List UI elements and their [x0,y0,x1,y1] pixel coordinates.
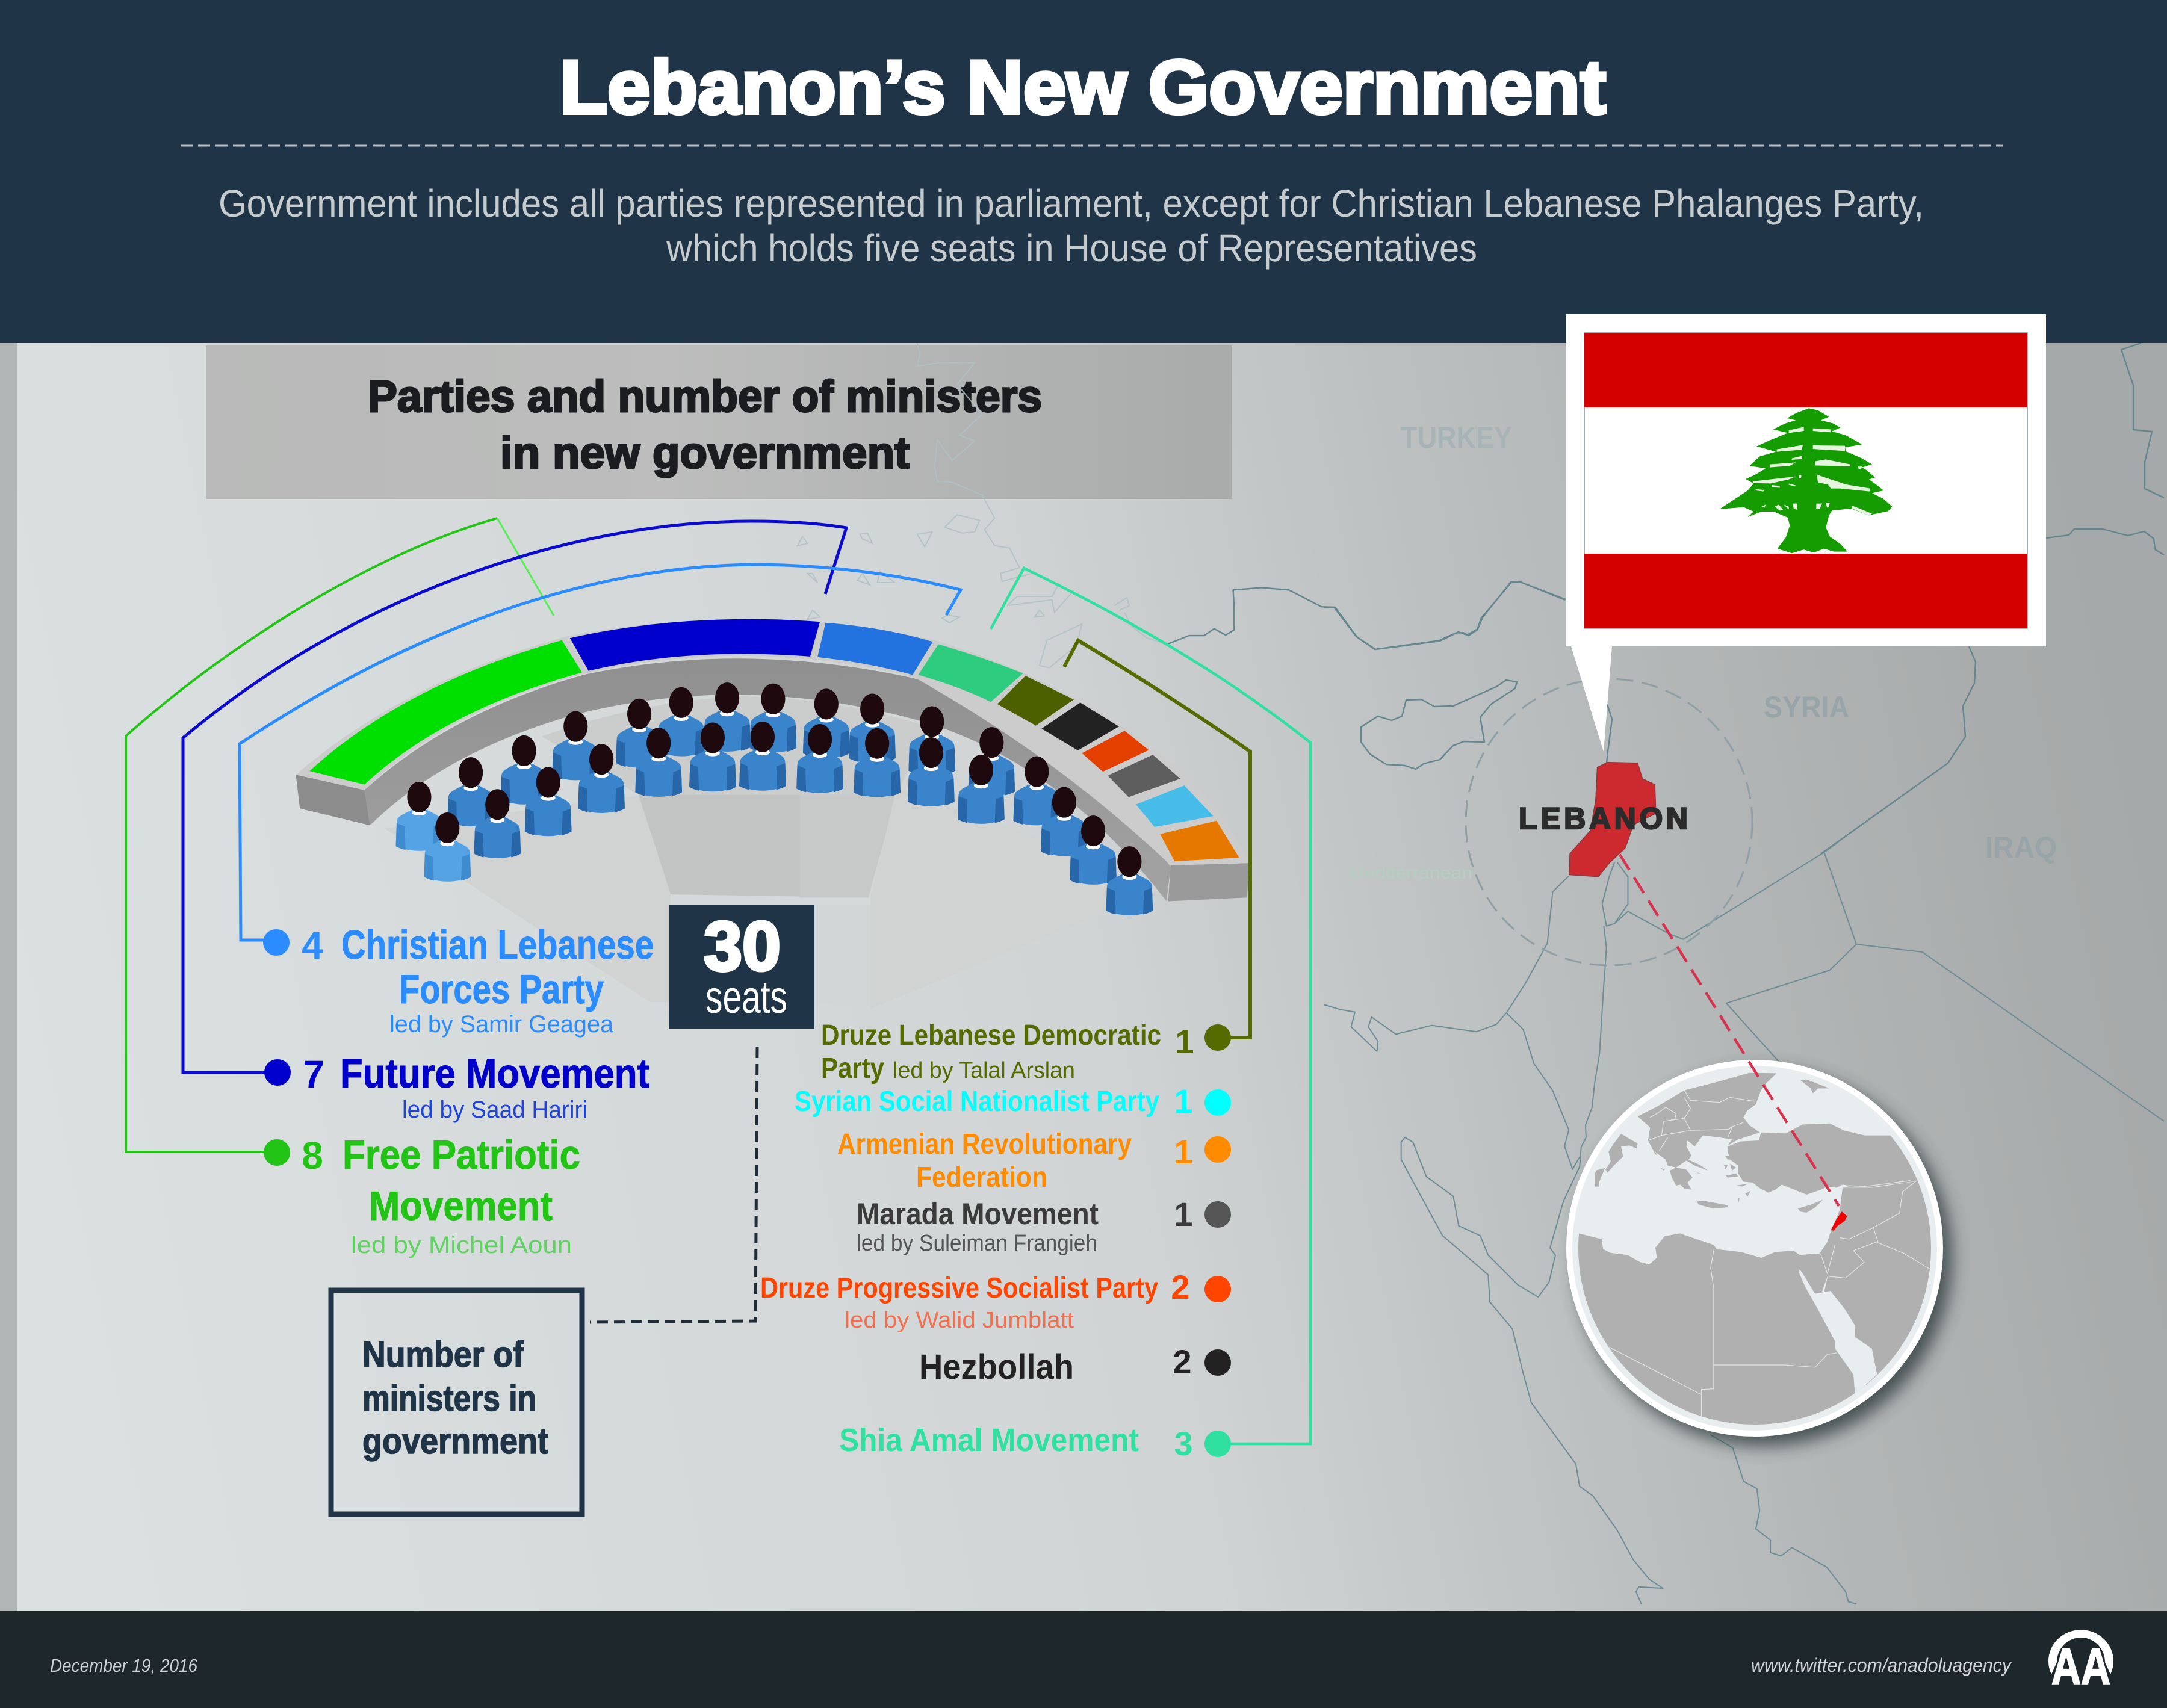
globe land masses [1578,1072,1931,1425]
legend: Armenian Revolutionary Federation: Federation [916,1162,1047,1193]
chamber wall [296,658,1249,901]
map outlines: Cyprus and east [1324,343,2164,853]
legend: Druze Lebanese Democratic Party [821,1020,1231,1085]
banner heading: in new government [500,428,910,478]
seats: Free Patriotic Movement [309,640,582,785]
seats: Future Movement [570,619,820,671]
connector: Future Movement [183,521,846,1072]
globe: Balkan borders [1648,1091,1910,1187]
key box: number of ministers: government [362,1421,548,1461]
seats: Christian Lebanese Forces [817,623,933,675]
globe: Peloponnese and Italy [1595,1134,1693,1190]
legend: Druze Progressive Socialist Party: 2 [1171,1268,1190,1306]
connector: Free Patriotic Movement [126,518,554,1152]
legend: Free Patriotic Movement [264,1132,580,1258]
seat count box: seats [705,972,787,1023]
legend: Free Patriotic Movement: Free Patriotic [343,1132,580,1178]
title: Lebanon’s New Government [560,45,1606,129]
seats: Progressive Socialist [1082,731,1149,772]
map background [0,343,2167,1611]
legend: Christian Lebanese Forces Party [263,922,654,1038]
key box: number of ministers: Number of [362,1334,524,1375]
section banner [206,345,1232,499]
subtitle: Government includes all parties represented in parliament, except for Christian Lebanese Phalanges Party, [219,182,1924,225]
seat count box: 30 [704,907,781,985]
country label: Turkey: TURKEY [1401,421,1512,454]
legend: Shia Amal Movement: 3 [1174,1425,1193,1462]
legend: Future Movement [264,1051,649,1123]
legend: Future Movement: Future Movement [340,1051,649,1097]
legend: Armenian Revolutionary Federation: Armenian Revolutionary [837,1128,1132,1160]
banner heading [368,371,1042,478]
legend: Shia Amal Movement: Shia Amal Movement [839,1422,1139,1458]
icon: cedar tree [1720,408,1892,553]
seats: Hezbollah [1041,702,1119,750]
legend: Free Patriotic Movement: Movement [369,1183,553,1229]
Lebanon map shape [1569,763,1656,877]
legend: Druze Lebanese Democratic Party: 1 [1175,1023,1194,1060]
legend: Druze Lebanese Democratic Party: Druze Lebanese Democratic [821,1020,1161,1051]
footer band [0,1611,2167,1708]
sea label: Mediterranean: Mediterranean [1348,864,1472,882]
seats: Shia Amal [918,644,1023,702]
legend: Hezbollah: Hezbollah [919,1348,1074,1387]
globe: islands [1653,1079,1829,1213]
faint Aegean outlines [798,343,1167,668]
seat: Syrian Social Nationalist [1136,785,1214,827]
legend: Druze Lebanese Democratic Party: led by Talal Arslan [893,1058,1075,1083]
header band [0,0,2167,343]
legend: Druze Progressive Socialist Party: led by Walid Jumblatt [845,1308,1074,1333]
legend: Free Patriotic Movement: 8 [302,1134,323,1177]
legend: Armenian Revolutionary Federation: 1 [1174,1133,1193,1171]
seat: Druze Lebanese Democratic [997,676,1074,726]
legend: Druze Progressive Socialist Party [760,1268,1231,1333]
seat count box [669,905,814,1029]
key box: number of ministers [331,1290,582,1514]
seat band base [296,620,1249,865]
globe: Balkans [1638,1073,1776,1171]
Lebanon highlight circle [1466,679,1752,965]
dashed connector to key box [590,1047,757,1322]
map outlines: Turkey coast [1167,582,1565,649]
footer source: www.twitter.com/anadoluagency [1751,1654,2012,1676]
legend: Syrian Social Nationalist Party: Syrian Social Nationalist Party [795,1086,1159,1118]
country label: Iraq: IRAQ [1985,831,2057,864]
legend: Druze Progressive Socialist Party: Druze Progressive Socialist Party [760,1272,1158,1304]
Lebanon label: LEBANON [1519,802,1688,835]
legend: Future Movement: 7 [303,1053,324,1096]
legend: Christian Lebanese Forces Party: led by Samir Geagea [389,1011,614,1038]
legend: Marada Movement: led by Suleiman Frangieh [857,1231,1097,1256]
legend: Syrian Social Nationalist Party: 1 [1174,1082,1193,1120]
locator globe [1566,1060,1952,1449]
logo: AA: AA [2051,1638,2110,1695]
legend: Armenian Revolutionary Federation [837,1128,1231,1193]
key box: number of ministers: ministers in [362,1378,536,1419]
dashed pointer from Lebanon to globe [1620,855,1839,1206]
left edge strip [0,343,17,1611]
subtitle: which holds five seats in House of Representatives [666,226,1477,270]
connector: Druze Lebanese Democratic [1064,640,1250,1038]
legend: Free Patriotic Movement: led by Michel Aoun [351,1232,572,1258]
legend: Christian Lebanese Forces Party: 4 [302,924,323,967]
connector: Christian Lebanese Forces [240,565,961,940]
legend: Marada Movement [857,1195,1231,1256]
parliament chamber diagram [296,619,1249,1009]
legend: Christian Lebanese Forces Party: Christian Lebanese [341,922,654,968]
country label: Syria: SYRIA [1764,690,1849,724]
legend: Druze Lebanese Democratic Party: Party [821,1053,884,1085]
chamber floor [385,696,1174,1009]
ministers figures [396,682,1153,915]
seat: Marada [1108,755,1180,797]
legend: Marada Movement: Marada Movement [857,1197,1099,1231]
connector: Shia Amal [991,568,1310,1444]
map outlines: south region [1324,843,2164,1604]
Lebanese flag [1584,333,2027,628]
globe: Turkey [1728,1124,1920,1195]
legend: Hezbollah: 2 [1173,1343,1192,1381]
globe: Lebanon [1831,1211,1847,1231]
seat: Armenian Revolutionary [1160,821,1239,861]
legend: Hezbollah [919,1343,1231,1387]
globe: Aegean shallows [1699,1139,1700,1140]
legend: Future Movement: led by Saad Hariri [402,1097,587,1123]
legend: Marada Movement: 1 [1174,1195,1193,1233]
legend: Christian Lebanese Forces Party: Forces Party [399,967,604,1012]
subtitle [219,182,1924,270]
flag callout [1566,314,2046,752]
footer date: December 19, 2016 [50,1655,198,1676]
banner heading: Parties and number of ministers [368,371,1042,421]
